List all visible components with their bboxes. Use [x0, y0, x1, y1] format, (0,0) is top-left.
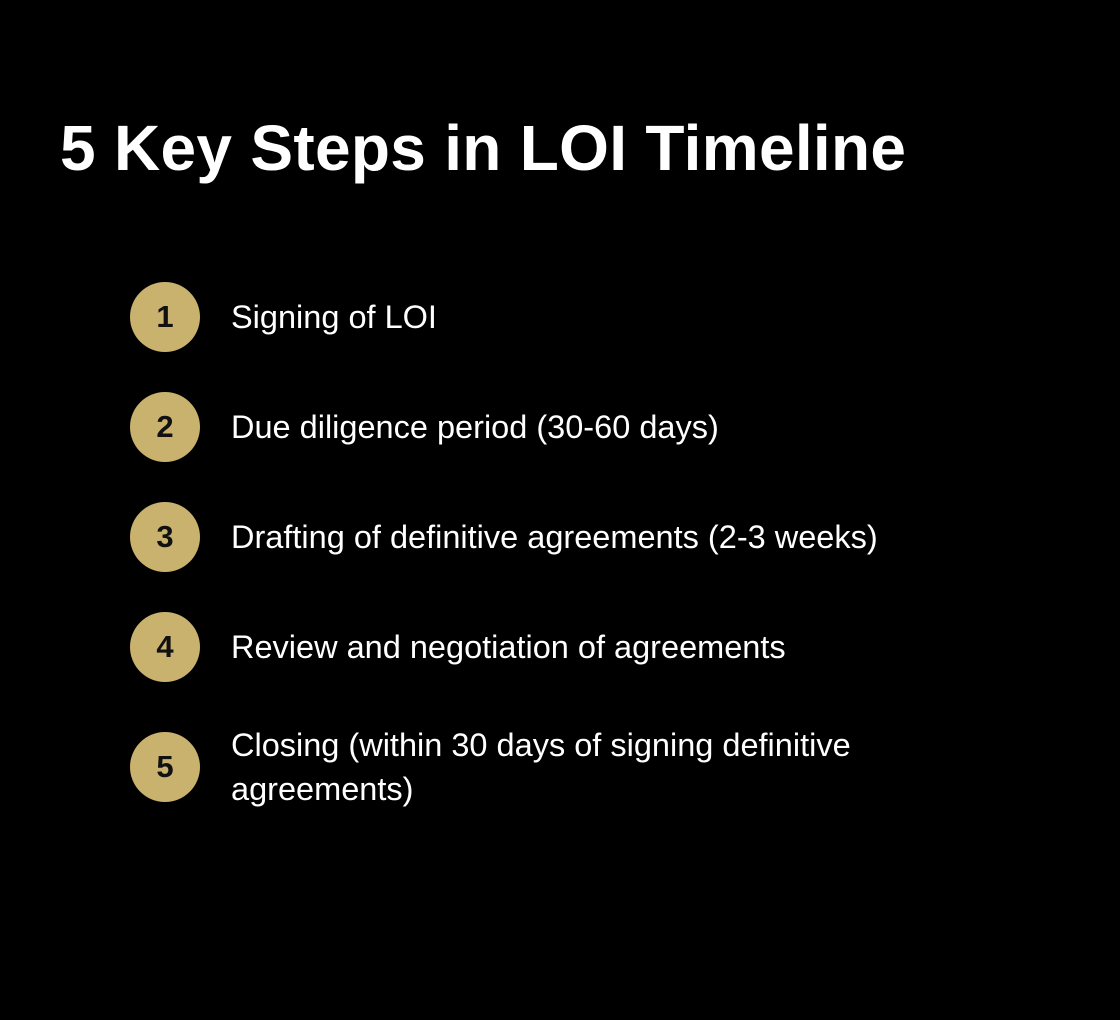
badge 3 [130, 502, 200, 572]
text 5: Closing (within 30 days of signing definitive agreements) [231, 727, 851, 807]
badge 5: 5 [156, 749, 174, 784]
badge 2: 2 [156, 409, 174, 444]
step 5 [130, 727, 851, 807]
step 4 [130, 612, 786, 682]
badge 5 [130, 732, 200, 802]
text 1: Signing of LOI [231, 299, 437, 335]
step 3 [130, 502, 878, 572]
badge 4: 4 [156, 629, 174, 664]
title: 5 Key Steps in LOI Timeline [60, 112, 906, 184]
text 4: Review and negotiation of agreements [231, 629, 786, 665]
badge 3: 3 [156, 519, 174, 554]
badge 2 [130, 392, 200, 462]
step 1 [130, 282, 437, 352]
text 2: Due diligence period (30-60 days) [231, 409, 719, 445]
badge 4 [130, 612, 200, 682]
badge 1: 1 [156, 299, 174, 334]
text 3: Drafting of definitive agreements (2-3 weeks) [231, 519, 878, 555]
badge 1 [130, 282, 200, 352]
step 2 [130, 392, 719, 462]
